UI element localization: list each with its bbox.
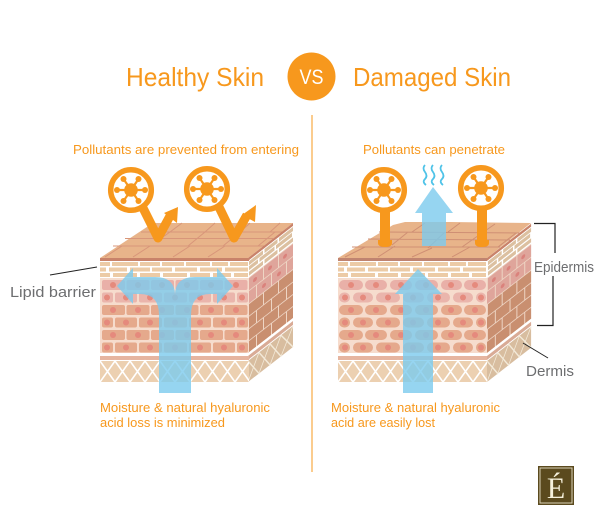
side face xyxy=(248,223,293,382)
caption: damaged: Moisture & natural hyaluronic xyxy=(331,401,500,415)
heading: pollutants penetrate: Pollutants can penetrate xyxy=(363,143,505,157)
label: epidermis bracket: Epidermis xyxy=(534,259,594,276)
broken top surface xyxy=(338,222,531,258)
front face xyxy=(338,258,488,382)
pollutant 1 deflected xyxy=(111,170,178,238)
title: Healthy Skin: Healthy Skin xyxy=(126,62,264,92)
label: dermis: Dermis xyxy=(526,363,574,380)
VS badge xyxy=(288,52,336,100)
pollutant 4 penetrating xyxy=(461,168,501,247)
top surface xyxy=(100,223,293,258)
caption: healthy: acid loss is minimized xyxy=(100,416,225,430)
side face xyxy=(487,224,531,382)
logo xyxy=(538,466,574,505)
arrow: moisture deflected xyxy=(117,268,233,393)
label: dermis xyxy=(523,343,574,380)
label: lipid barrier: Lipid barrier xyxy=(10,284,96,301)
logo: É xyxy=(547,472,565,505)
VS badge: VS xyxy=(300,66,324,89)
arrow: moisture rising through skin xyxy=(395,269,442,393)
icon: evaporation waves xyxy=(424,165,444,185)
healthy skin cube xyxy=(100,223,293,393)
heading: pollutants prevented: Pollutants are prevented from entering xyxy=(73,143,299,157)
pollutant 3 penetrating xyxy=(364,170,404,247)
label: epidermis bracket xyxy=(534,224,594,326)
front face xyxy=(100,258,250,382)
label: lipid barrier xyxy=(10,267,97,301)
caption: damaged: acid are easily lost xyxy=(331,416,436,430)
damaged skin cube xyxy=(338,222,531,393)
pollutant 2 deflected xyxy=(187,169,256,238)
caption: healthy: Moisture & natural hyaluronic xyxy=(100,401,270,415)
title: Damaged Skin: Damaged Skin xyxy=(353,62,511,92)
arrow: moisture escaping xyxy=(415,187,453,246)
